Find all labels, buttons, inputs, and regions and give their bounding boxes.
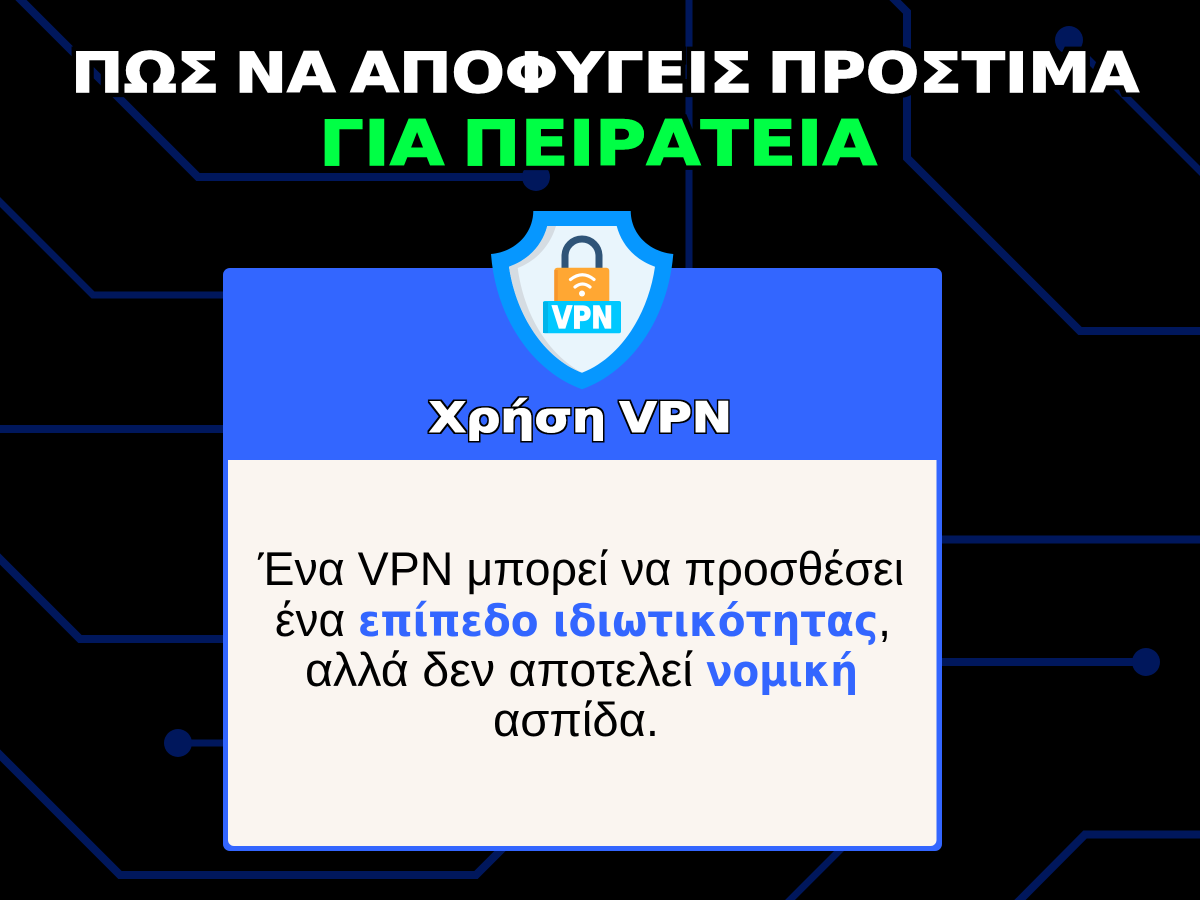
panel header and border — [223, 268, 942, 851]
body text: επίπεδο ιδιωτικότητας — [358, 596, 878, 647]
icon: VPN shield: VPN — [552, 301, 613, 336]
body text: Ένα VPN μπορεί να προσθέσει — [257, 542, 904, 595]
body text: νομική — [706, 646, 858, 697]
title line 2: ΓΙΑ ΠΕΙΡΑΤΕΙΑ — [319, 107, 877, 180]
body text: ένα — [275, 593, 345, 646]
panel body — [228, 460, 936, 846]
body text: , — [878, 593, 891, 646]
body text: αλλά δεν αποτελεί — [305, 643, 693, 696]
title line 1: ΠΩΣ ΝΑ ΑΠΟΦΥΓΕΙΣ ΠΡΟΣΤΙΜΑ — [71, 41, 1139, 105]
body text — [257, 542, 904, 746]
panel: VPN card — [223, 211, 942, 851]
heading: VPN use: Χρήση VPN — [429, 393, 732, 442]
body text: ασπίδα. — [493, 693, 659, 746]
icon: VPN shield — [491, 211, 673, 389]
